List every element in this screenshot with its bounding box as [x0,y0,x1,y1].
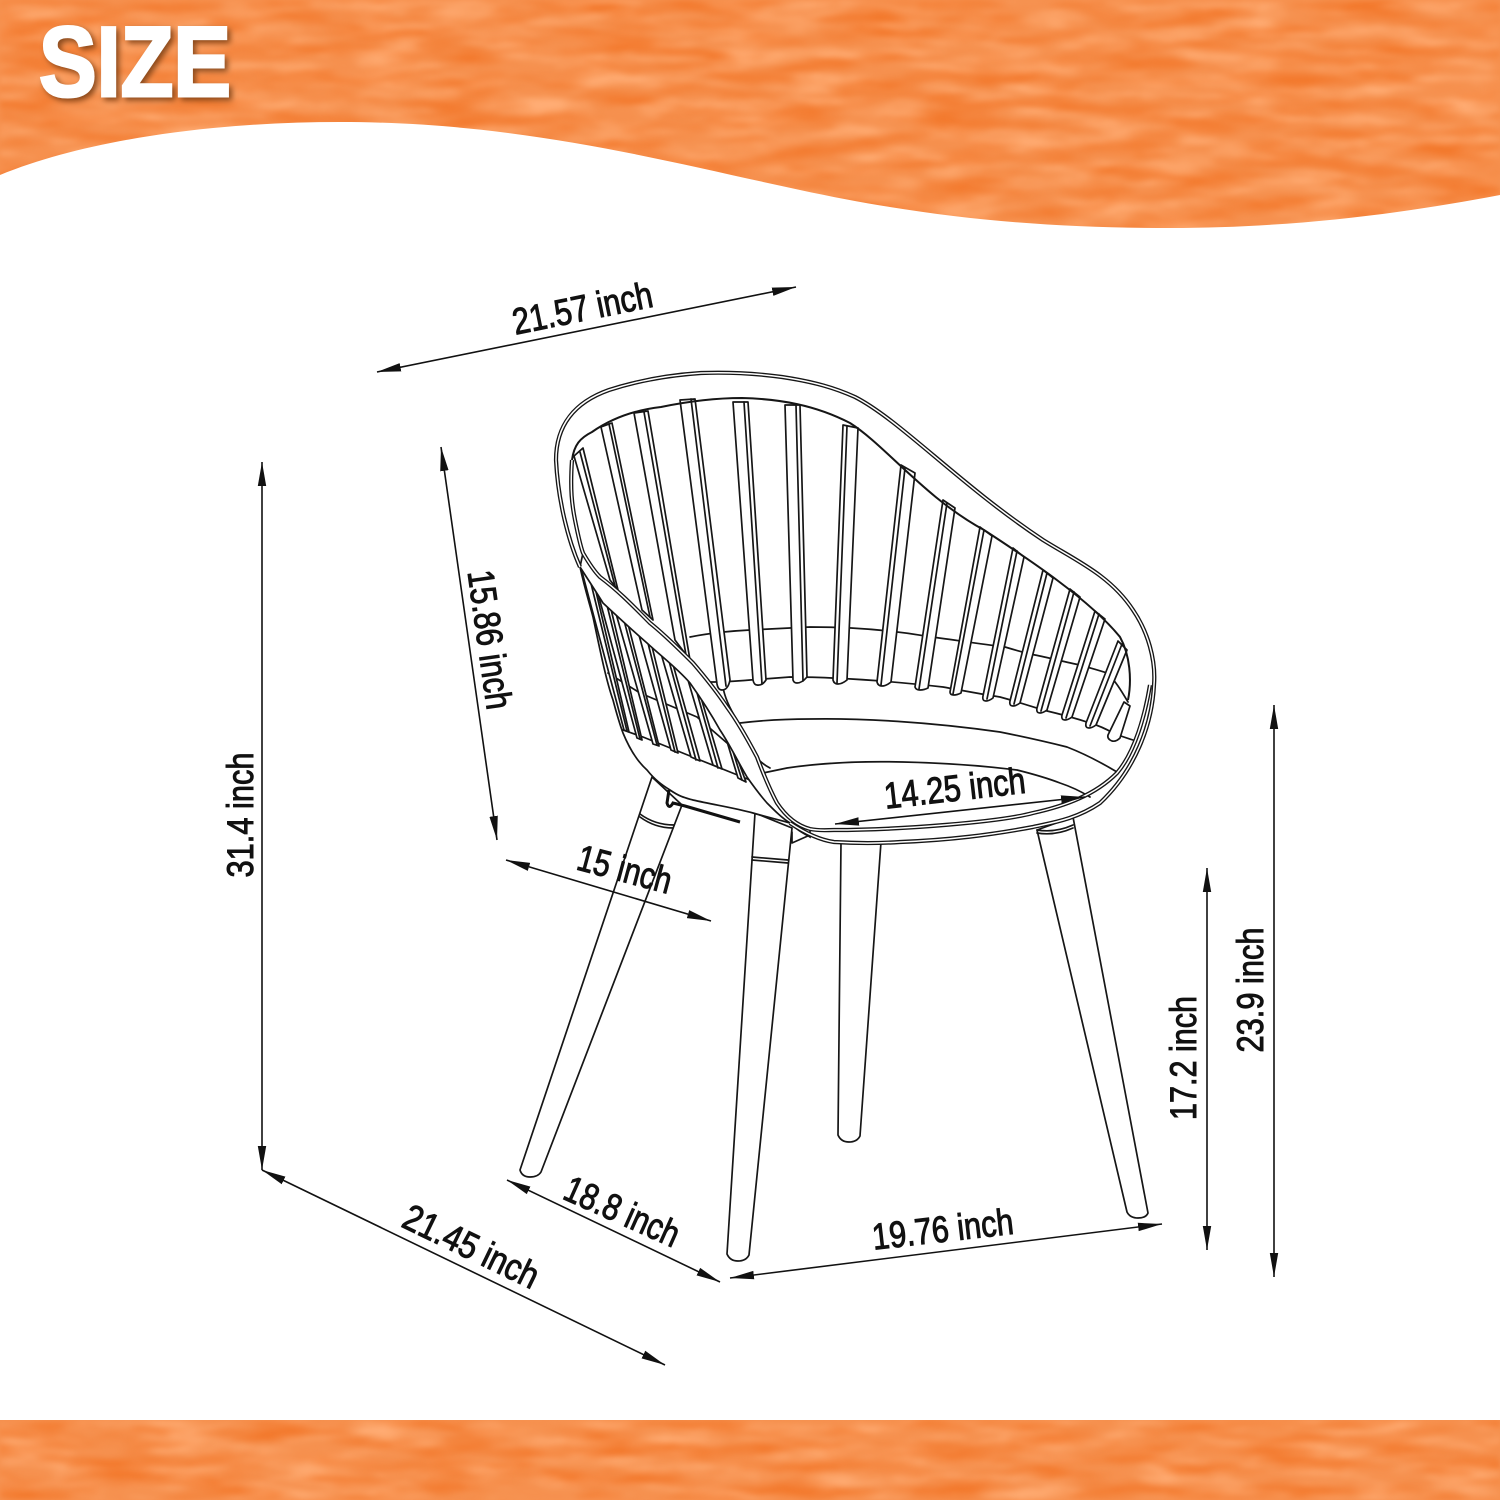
arm upper rim highlight [571,460,1150,830]
dimension: seat width 14.25 inch: 14.25 inch [882,760,1028,817]
dimension: top width 21.57 inch [377,274,796,372]
legs [520,777,1148,1261]
inner opening line [572,398,1130,700]
shell body outline [580,567,790,823]
underside bracket [667,790,740,822]
dimension: leg span side 18.8 inch: 18.8 inch [558,1168,686,1255]
arm band [580,553,810,837]
title: SIZE [39,6,231,117]
dimension: overall height 31.4 inch: 31.4 inch [220,752,261,878]
dimension: top width 21.57 inch: 21.57 inch [509,274,656,343]
dimension: arm height 23.9 inch: 23.9 inch [1230,928,1271,1052]
shell fill [556,373,1154,843]
dimension: back height 15.86 inch [441,447,520,840]
dimension: seat depth 15 inch [506,837,711,921]
outer rim highlight [556,373,1154,843]
top orange wood-texture banner with wave edge [0,0,1500,245]
inner seat lines [608,627,1133,797]
dimension: seat height 17.2 inch: 17.2 inch [1163,996,1204,1120]
dimension: leg span side 18.8 inch [507,1168,720,1282]
dimension: seat width 14.25 inch [835,760,1085,824]
dimension: leg span front 19.76 inch [730,1201,1162,1278]
dimension: back height 15.86 inch: 15.86 inch [460,567,520,712]
outer rim, double line [556,373,1154,843]
dimension: overall depth 21.45 inch [262,1170,665,1365]
dimension: leg span front 19.76 inch: 19.76 inch [870,1201,1016,1258]
dimension: seat depth 15 inch: 15 inch [573,837,676,902]
dimension: overall depth 21.45 inch: 21.45 inch [397,1196,546,1297]
chair line drawing [520,373,1154,1261]
lower left slats [581,566,746,782]
bottom orange wood-texture band [0,1420,1500,1500]
rim opening and arm [556,373,1154,843]
arm upper and front inner rim, double line [571,460,1150,830]
back slats [574,399,1130,741]
